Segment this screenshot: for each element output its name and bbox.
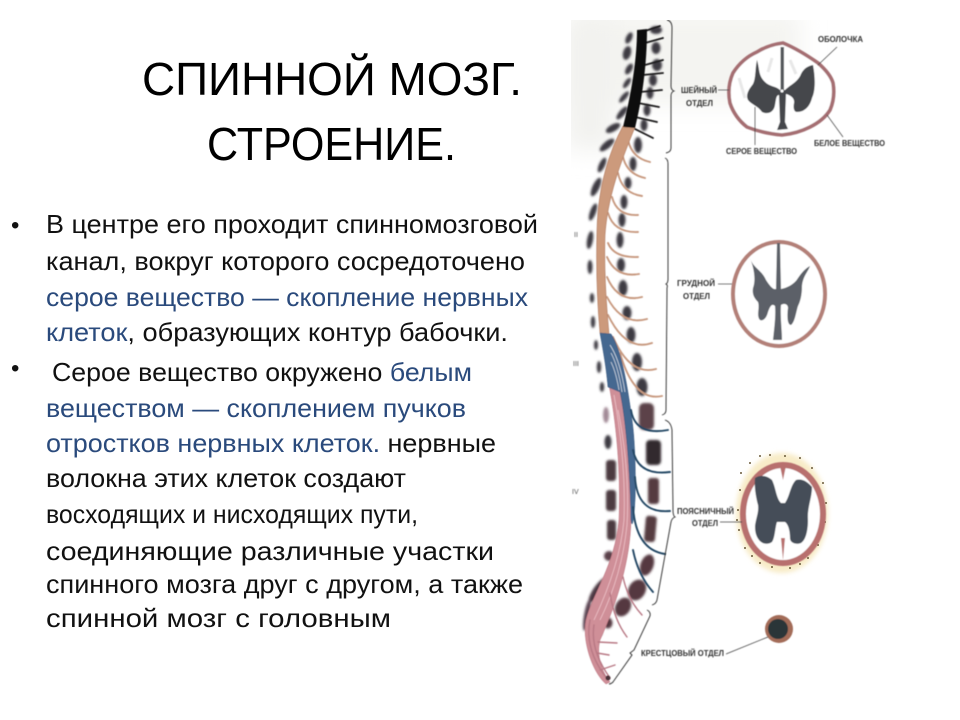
bullet 1: канал, вокруг которого сосредоточено bbox=[46, 246, 525, 276]
septum bbox=[780, 47, 784, 91]
label: грудной отдел: ГРУДНОЙ bbox=[677, 279, 715, 288]
vertebrae left blobs bbox=[581, 31, 635, 631]
bullet 2 bbox=[11, 355, 523, 633]
orange nerves bbox=[607, 140, 662, 397]
bullet 1: серое вещество — скопление нервных bbox=[46, 282, 528, 312]
bullet 2: Серое вещество окружено белым bbox=[52, 357, 472, 387]
brackets bbox=[609, 20, 675, 684]
cauda equina nerves bbox=[589, 577, 642, 680]
filum end bbox=[606, 676, 610, 680]
bullet 1: • bbox=[11, 212, 19, 239]
title bbox=[142, 53, 522, 170]
yellow halo bbox=[736, 453, 828, 573]
blue nerves bbox=[631, 410, 670, 592]
bullet 2: • bbox=[11, 355, 19, 382]
title: СТРОЕНИЕ. bbox=[207, 118, 456, 170]
roman numerals bbox=[572, 232, 579, 496]
bullet 1: В центре его проходит спинномозговой bbox=[46, 209, 538, 239]
cross-section: sacral bbox=[765, 615, 793, 643]
blue strand lines bbox=[610, 345, 625, 392]
cross-section: lumbar bbox=[736, 453, 828, 573]
black cervical cord bbox=[623, 29, 647, 128]
label: крестцовый отдел bbox=[641, 637, 768, 658]
label: грудной отдел: ОТДЕЛ bbox=[683, 292, 710, 301]
black nerves cervical bbox=[633, 26, 663, 138]
septal notches bbox=[780, 466, 786, 560]
bullet 2: спинной мозг с головным bbox=[46, 603, 391, 633]
blue cord bbox=[600, 333, 635, 524]
text block: bullet points bbox=[11, 209, 538, 633]
label: оболочка bbox=[818, 35, 863, 65]
label: поясничный отдел: ПОЯСНИЧНЫЙ bbox=[677, 507, 734, 516]
orange cord bbox=[597, 126, 635, 334]
label: грудной отдел bbox=[677, 279, 732, 301]
gray matter bbox=[747, 60, 815, 130]
photo background tint bbox=[571, 20, 798, 150]
label: серое вещество: СЕРОЕ ВЕЩЕСТВО bbox=[726, 147, 797, 156]
central canal bbox=[780, 90, 784, 92]
label: серое вещество bbox=[726, 107, 797, 156]
labels and leader lines bbox=[572, 35, 885, 658]
roman numerals: III bbox=[573, 361, 579, 368]
bullet 2: отростков нервных клеток. нервные bbox=[46, 428, 496, 458]
bullet 2: волокна этих клеток создают bbox=[46, 463, 406, 493]
bullet 2: восходящих и нисходящих пути, bbox=[46, 499, 418, 529]
label: поясничный отдел: ОТДЕЛ bbox=[692, 519, 718, 528]
label: шейный отдел bbox=[681, 86, 729, 108]
label: шейный отдел: ОТДЕЛ bbox=[686, 99, 713, 108]
spine column bbox=[581, 26, 670, 684]
roman numerals: IV bbox=[572, 489, 579, 496]
vertebrae right blobs bbox=[598, 26, 662, 636]
title: СПИННОЙ МОЗГ. bbox=[142, 53, 522, 105]
label: белое вещество: БЕЛОЕ ВЕЩЕСТВО bbox=[814, 139, 885, 148]
label: крестцовый отдел: КРЕСТЦОВЫЙ ОТДЕЛ bbox=[641, 649, 724, 658]
pale fibres bbox=[739, 58, 796, 98]
bullet 1: клеток, образующих контур бабочки. bbox=[46, 317, 508, 347]
label: белое вещество bbox=[814, 115, 885, 148]
label: шейный отдел: ШЕЙНЫЙ bbox=[681, 86, 717, 95]
pink lower cord bbox=[585, 385, 632, 684]
bullet 1 bbox=[11, 209, 538, 347]
bullet 2: спинного мозга друг с другом, а также bbox=[46, 569, 523, 599]
cross-section: thoracic bbox=[733, 242, 825, 346]
bullet 2: веществом — скоплением пучков bbox=[46, 393, 466, 423]
bullet 2: соединяющие различные участки bbox=[46, 536, 494, 566]
cross-section: cervical bbox=[729, 43, 834, 135]
pink strands bbox=[594, 395, 628, 620]
anatomical figure: spinal cord bbox=[565, 10, 885, 684]
roman numerals: II bbox=[574, 232, 578, 239]
label: оболочка: ОБОЛОЧКА bbox=[818, 35, 863, 44]
dots bbox=[736, 454, 827, 569]
label: поясничный отдел bbox=[677, 507, 742, 528]
